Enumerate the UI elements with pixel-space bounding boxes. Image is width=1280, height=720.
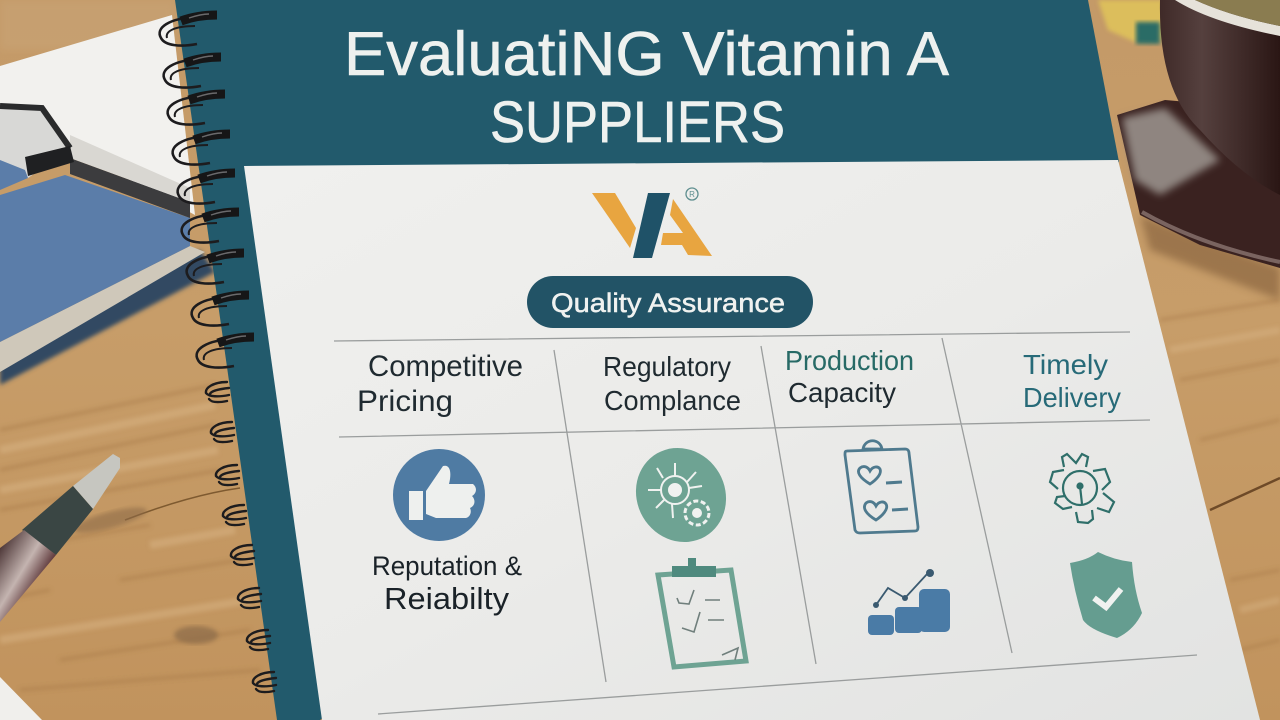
column heading: production capacity: Capacity <box>788 377 896 408</box>
quality assurance pill <box>527 276 813 328</box>
text: reputation and reliability: Reputation & <box>372 551 522 581</box>
column heading: timely delivery: Timely <box>1023 349 1108 380</box>
icon: shield check <box>1070 552 1142 638</box>
table grid lines <box>334 332 1197 714</box>
notebook page <box>244 160 1260 720</box>
title: EvaluatiNG Vitamin A <box>344 20 950 89</box>
column heading: competitive pricing: Pricing <box>357 385 453 418</box>
column heading: production capacity: Production <box>785 345 914 376</box>
icon: thumbs up <box>393 449 485 541</box>
title: SUPPLIERS <box>490 90 785 155</box>
column heading: timely delivery: Delivery <box>1023 382 1121 413</box>
text: reputation and reliability <box>372 551 522 616</box>
column heading: competitive pricing <box>357 350 523 418</box>
white sheet bottom left corner <box>0 677 42 720</box>
column heading: production capacity <box>785 345 914 408</box>
VA logo <box>592 188 712 258</box>
column heading: regulatory compliance: Complance <box>604 385 741 416</box>
text: reputation and reliability: Reiabilty <box>384 581 510 616</box>
icon: heart clipboard <box>845 441 918 533</box>
icon: gears in circle <box>619 431 743 559</box>
column heading: competitive pricing: Competitive <box>368 350 523 383</box>
pen <box>0 454 149 622</box>
icon: checklist clipboard <box>658 558 746 667</box>
icon: gear with gauge <box>1050 454 1114 523</box>
coffee cup and saucer <box>1098 0 1280 268</box>
VA logo: R <box>689 190 695 199</box>
column heading: regulatory compliance <box>603 351 741 416</box>
column heading: timely delivery <box>1023 349 1121 413</box>
blue book with pages and glasses <box>0 105 215 385</box>
quality assurance pill: Quality Assurance <box>551 288 785 318</box>
title <box>344 20 950 155</box>
notebook cover <box>175 0 1119 720</box>
icon: cylinders and trend chart <box>868 569 950 635</box>
spiral binding <box>160 14 276 692</box>
column heading: regulatory compliance: Regulatory <box>603 351 731 382</box>
white notebook under the binding <box>0 15 195 215</box>
